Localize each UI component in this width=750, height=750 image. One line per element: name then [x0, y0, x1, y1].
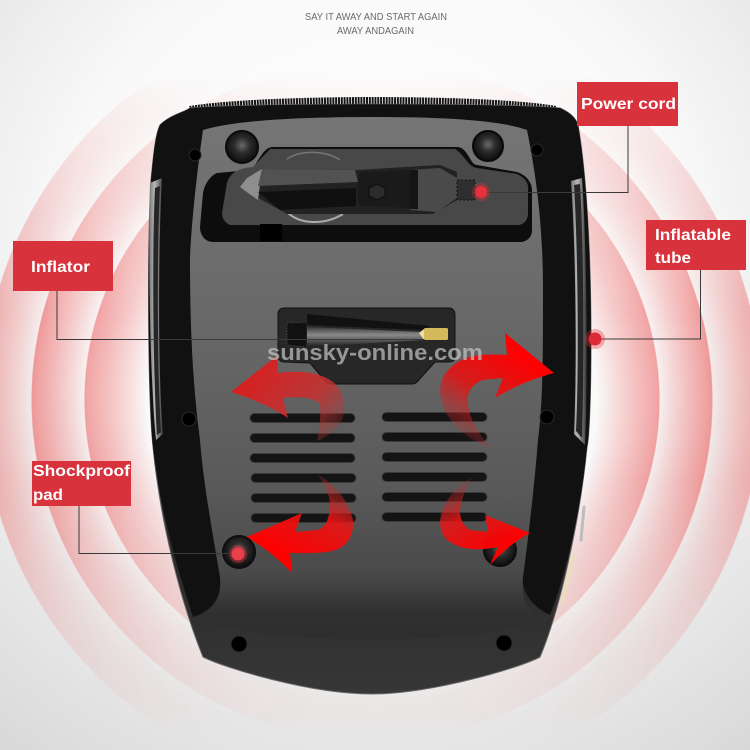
power plug [240, 152, 475, 222]
tagline: AWAY ANDAGAIN [337, 26, 414, 37]
tagline [305, 12, 447, 37]
label: Power cord: Power cord [581, 96, 676, 113]
label: Inflator [13, 241, 113, 291]
label: Shockproof pad [32, 461, 131, 506]
top ridged vent [190, 101, 556, 110]
compartment inner tray [222, 149, 528, 225]
shockproof pads [223, 536, 255, 568]
right silver trim [571, 178, 587, 445]
device: inflator pump back view [149, 101, 591, 694]
device body shell [149, 104, 591, 694]
label: Inflator: Inflator [31, 259, 90, 276]
label: Inflatable tube: Inflatable [655, 227, 731, 244]
top mounting buttons [226, 131, 258, 163]
screw holes [182, 144, 554, 652]
label: Shockproof pad: pad [33, 487, 63, 504]
airflow arrow: bottom right [440, 477, 530, 565]
airflow arrow: bottom left [247, 475, 353, 573]
small tab [260, 224, 282, 241]
airflow arrow: top right [440, 333, 554, 448]
tagline: SAY IT AWAY AND START AGAIN [305, 12, 447, 23]
callout dot: shockproof pad [229, 545, 247, 563]
black side grips [149, 104, 591, 617]
label: Power cord [577, 82, 678, 126]
lower right edge trim [562, 507, 584, 602]
vent slots left [250, 414, 356, 522]
inflator needle [287, 314, 448, 347]
label: Shockproof pad: Shockproof [33, 463, 131, 480]
airflow arrow: top left [231, 355, 344, 441]
callout dot: power cord [472, 183, 490, 201]
left silver trim [149, 178, 163, 440]
cord compartment well [200, 147, 532, 242]
inflator slot [278, 308, 455, 384]
label: Inflatable tube [646, 220, 746, 270]
vent slots right [382, 412, 487, 522]
gray back panel [190, 117, 550, 640]
watermark: sunsky-online.com [267, 340, 483, 365]
callout dot: inflatable tube [585, 329, 605, 349]
label: Inflatable tube: tube [655, 250, 691, 267]
callout lines [57, 126, 700, 554]
